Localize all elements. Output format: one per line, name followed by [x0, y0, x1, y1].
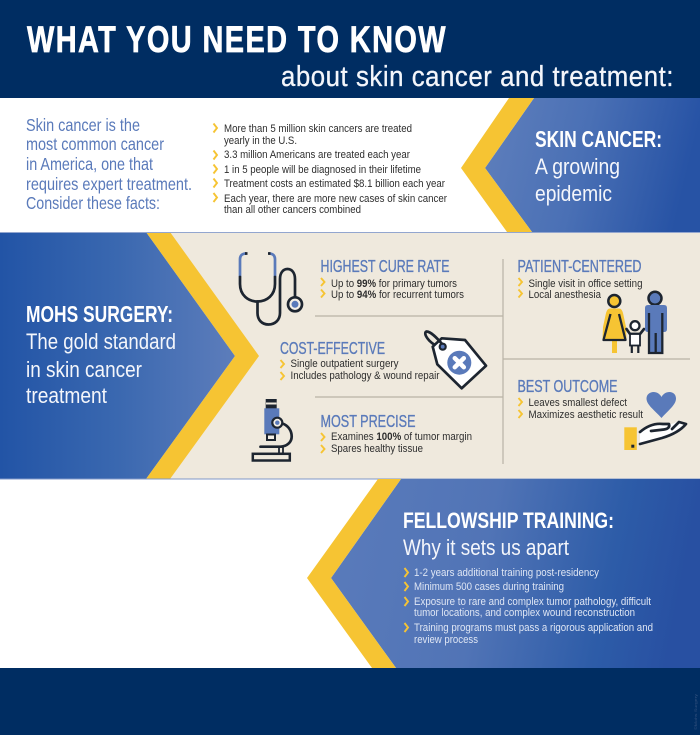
intro paragraph: in America, one that	[26, 154, 153, 174]
icon: price tag	[425, 332, 486, 388]
facts list	[214, 123, 447, 216]
panel subheading: Why it sets us apart	[403, 535, 570, 560]
banner subheading: The gold standard	[26, 329, 176, 354]
intro paragraph: Consider these facts:	[26, 193, 160, 213]
benefit: most precise: Spares healthy tissue	[331, 443, 423, 455]
benefit: most precise: Examines 100% of tumor margin	[331, 431, 472, 443]
facts list: yearly in the U.S.	[224, 135, 297, 147]
benefit: most precise: MOST PRECISE	[320, 411, 416, 431]
banner subheading	[26, 329, 176, 408]
banner heading: MOHS SURGERY:	[26, 301, 173, 327]
benefit: cost-effective: Includes pathology & wound repair	[290, 370, 440, 382]
panel: skin cancer facts	[0, 98, 700, 232]
banner subheading: treatment	[26, 383, 108, 408]
intro paragraph	[26, 115, 192, 213]
banner subheading: epidemic	[535, 181, 612, 206]
benefit: most precise	[320, 411, 472, 455]
icon: microscope	[253, 399, 292, 460]
header band	[0, 0, 700, 98]
fellowship list	[404, 567, 653, 646]
facts list: 1 in 5 people will be diagnosed in their lifetime	[224, 164, 421, 176]
benefit: highest cure rate: HIGHEST CURE RATE	[320, 256, 450, 276]
banner heading: SKIN CANCER:	[535, 126, 662, 152]
intro paragraph: most common cancer	[26, 134, 164, 154]
banner subheading: in skin cancer	[26, 357, 142, 382]
intro paragraph: Skin cancer is the	[26, 115, 140, 135]
facts list: Each year, there are more new cases of skin cancer	[224, 193, 447, 205]
benefit: best outcome	[518, 376, 643, 421]
benefit: patient-centered: Local anesthesia	[528, 289, 602, 301]
benefit: cost-effective	[280, 338, 440, 382]
fellowship list: Training programs must pass a rigorous application and	[414, 622, 653, 634]
benefit: best outcome: BEST OUTCOME	[518, 376, 618, 396]
benefit: cost-effective: COST-EFFECTIVE	[280, 338, 385, 358]
mohs surgery arrow banner	[0, 232, 259, 479]
fellowship list: Exposure to rare and complex tumor pathology, difficult	[414, 596, 651, 608]
benefit: highest cure rate: Up to 94% for recurrent tumors	[331, 289, 464, 301]
benefit: patient-centered	[518, 256, 642, 301]
fellowship list: Minimum 500 cases during training	[414, 581, 564, 593]
banner subheading: A growing	[535, 154, 620, 179]
banner subheading	[535, 154, 620, 206]
benefit: cost-effective: Single outpatient surgery	[290, 358, 399, 370]
fellowship list: tumor locations, and complex wound reconstruction	[414, 607, 635, 619]
benefit: best outcome: Leaves smallest defect	[528, 397, 627, 409]
icon: stethoscope	[240, 254, 302, 324]
panel: fellowship training	[307, 479, 700, 668]
footer band	[0, 668, 700, 735]
benefit: patient-centered: Single visit in office setting	[528, 278, 642, 290]
icon: heart in hand	[624, 392, 686, 450]
skin cancer arrow banner	[461, 98, 700, 232]
panel heading: FELLOWSHIP TRAINING:	[403, 508, 614, 533]
benefit: best outcome: Maximizes aesthetic result	[528, 409, 643, 421]
intro paragraph: requires expert treatment.	[26, 174, 192, 194]
panel: mohs surgery benefits background	[0, 232, 700, 479]
facts list: 3.3 million Americans are treated each year	[224, 149, 410, 161]
benefit: highest cure rate: Up to 99% for primary tumors	[331, 278, 457, 290]
benefit: patient-centered: PATIENT-CENTERED	[518, 256, 642, 276]
fellowship list: 1-2 years additional training post-residency	[414, 567, 599, 579]
facts list: than all other cancers combined	[224, 204, 361, 216]
benefit: highest cure rate	[320, 256, 464, 301]
title: WHAT YOU NEED TO KNOW	[27, 19, 447, 60]
image credit: ©Mohs Surgery	[693, 694, 698, 730]
facts list: Treatment costs an estimated $8.1 billion each year	[224, 178, 445, 190]
icon: family	[602, 292, 667, 353]
fellowship list: review process	[414, 634, 478, 646]
facts list: More than 5 million skin cancers are treated	[224, 123, 412, 135]
